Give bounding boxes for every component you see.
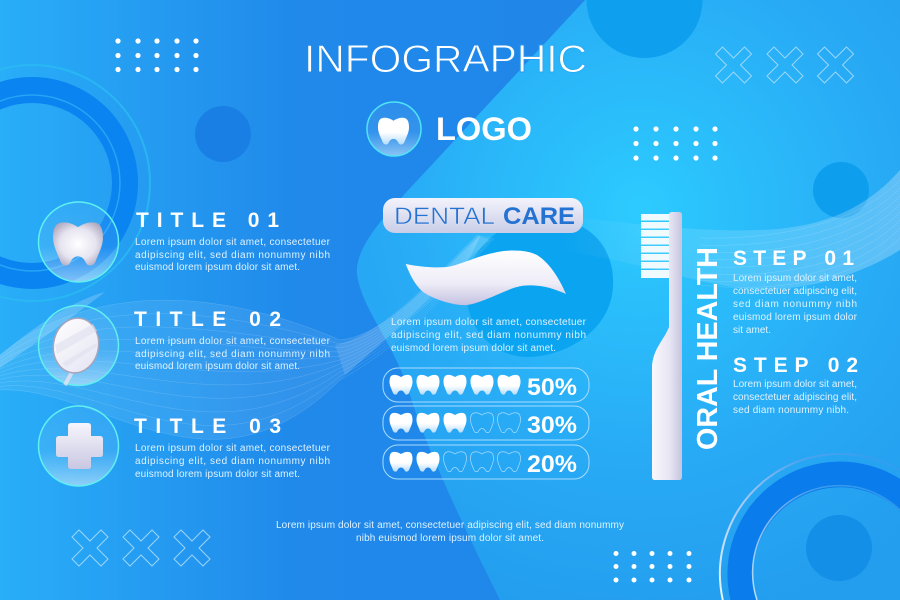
text block	[135, 237, 331, 273]
icon: logo tooth badge	[367, 102, 421, 156]
panel: dental care	[383, 198, 589, 479]
text block	[135, 336, 331, 372]
text block	[733, 273, 858, 336]
vertical label: oral health: ORAL HEALTH	[692, 247, 724, 450]
footer text: Lorem ipsum dolor sit amet, consectetuer adipiscing elit, sed diam nonummy	[276, 520, 624, 531]
logo	[367, 102, 532, 156]
rating row: 30%: 30%	[527, 412, 577, 439]
heading: TITLE 01	[136, 209, 279, 232]
logo wordmark: LOGO	[436, 111, 532, 147]
heading: TITLE 03	[134, 415, 281, 438]
text block	[391, 317, 587, 354]
icon: dental mirror	[38, 306, 118, 386]
panel: title 03	[38, 406, 331, 486]
icon: medical cross	[38, 406, 118, 486]
rating row: 50%	[383, 368, 589, 402]
wave: left mesh	[0, 235, 495, 439]
ring: top-left decoration	[0, 65, 150, 301]
heading: TITLE 02	[134, 308, 281, 331]
text block: Lorem ipsum dolor sit amet, consectetuer	[391, 317, 587, 328]
rating row: 20%: 20%	[527, 451, 577, 478]
text block: euismod lorem ipsum dolor sit amet.	[391, 343, 556, 354]
title: INFOGRAPHIC	[304, 38, 587, 81]
rating row: 50%: 50%	[527, 374, 577, 401]
toothbrush	[641, 212, 682, 480]
footer text: nibh euismod lorem ipsum dolor sit amet.	[356, 533, 544, 544]
rating row: 20%	[383, 445, 589, 479]
text block: sed diam nonummy nibh.	[733, 405, 849, 416]
decorative circle: behind toothpaste	[467, 219, 613, 357]
text block: adipiscing elit, sed diam nonummy nibh	[135, 250, 330, 261]
text block: consectetuer adipiscing elit,	[733, 286, 857, 297]
icon: tooth	[38, 202, 118, 282]
toothpaste swoosh	[406, 251, 566, 305]
heading pill: CARE	[503, 203, 575, 230]
heading: STEP 02	[733, 354, 858, 377]
panel: step 01	[733, 247, 858, 336]
heading: STEP 01	[733, 247, 854, 270]
heading pill	[383, 198, 583, 233]
bristles	[641, 214, 669, 278]
text block: Lorem ipsum dolor sit amet,	[733, 379, 857, 390]
text block: euismod lorem ipsum dolor sit amet.	[135, 262, 300, 273]
text block: Lorem ipsum dolor sit amet,	[733, 273, 857, 284]
text block: euismod lorem ipsum dolor sit amet.	[135, 361, 300, 372]
dots: bottom-right	[614, 551, 692, 582]
panel: title 01	[38, 202, 331, 282]
text block	[135, 443, 331, 480]
cross marks: bottom-left	[72, 530, 210, 566]
text block	[733, 379, 857, 416]
rating row: 30%	[383, 406, 589, 440]
text block: euismod lorem ipsum dolor	[733, 312, 858, 323]
text block: Lorem ipsum dolor sit amet, consectetuer	[135, 237, 331, 248]
heading pill: DENTAL	[394, 203, 495, 230]
cross marks: top-right	[716, 47, 854, 83]
panel: step 02	[733, 354, 858, 416]
footer text	[276, 520, 624, 544]
dots: top-left	[115, 38, 199, 72]
text block: euismod lorem ipsum dolor sit amet.	[135, 469, 300, 480]
text block: adipiscing elit, sed diam nonummy nibh	[135, 349, 330, 360]
text block: sit amet.	[733, 325, 771, 336]
background: light right shape	[357, 0, 900, 600]
text block: Lorem ipsum dolor sit amet, consectetuer	[135, 336, 331, 347]
ring: bottom-right decoration	[720, 454, 900, 600]
decorative circle: right	[813, 162, 869, 218]
dots: top-right	[633, 126, 718, 161]
text block: consectetuer adipiscing elit,	[733, 392, 857, 403]
text block: sed diam nonummy nibh	[733, 299, 857, 310]
handle	[652, 212, 682, 480]
decorative circle: upper left	[195, 106, 251, 162]
text block: Lorem ipsum dolor sit amet, consectetuer	[135, 443, 331, 454]
panel: title 02	[38, 306, 331, 386]
wave: centre diagonal band	[335, 235, 490, 375]
decorative circle: top centre	[586, 0, 702, 58]
text block: adipiscing elit, sed diam nonummy nibh	[391, 330, 586, 341]
text block: adipiscing elit, sed diam nonummy nibh	[135, 456, 330, 467]
wave: top-right mesh	[560, 170, 900, 289]
